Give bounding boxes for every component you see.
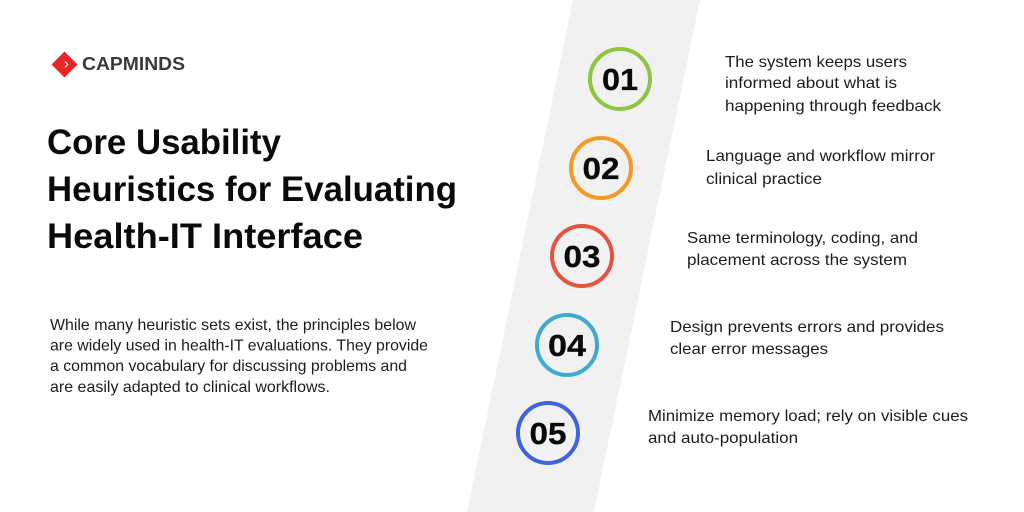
diagonal grey band: [467, 0, 700, 512]
title: Health-IT Interface: [47, 217, 363, 256]
item 01: [590, 49, 942, 115]
text 01: The system keeps users: [725, 54, 907, 71]
badge 02: [571, 138, 631, 198]
intro paragraph: [50, 317, 428, 396]
intro paragraph: While many heuristic sets exist, the principles below: [50, 317, 416, 334]
badge 01: 01: [602, 62, 638, 97]
title: Core Usability: [47, 123, 282, 162]
badge 02: 02: [582, 151, 620, 186]
intro paragraph: are widely used in health-IT evaluations. They provide: [50, 338, 428, 354]
badge 04: [537, 315, 597, 375]
badge 04: 04: [548, 328, 587, 363]
badge 01: [590, 49, 650, 109]
title: Heuristics for Evaluating: [47, 170, 457, 209]
text 05: and auto-population: [648, 430, 798, 447]
logo: Capminds: [52, 52, 185, 78]
logo: Capminds: CAPMINDS: [82, 54, 185, 74]
text 03: placement across the system: [687, 252, 907, 269]
text 04: Design prevents errors and provides: [670, 319, 944, 336]
intro paragraph: a common vocabulary for discussing problems and: [50, 358, 407, 375]
badge 05: [518, 403, 578, 463]
badge 03: [552, 226, 612, 286]
item 02: [571, 138, 936, 198]
intro paragraph: are easily adapted to clinical workflows.: [50, 379, 330, 396]
badge 05: 05: [530, 416, 566, 451]
item 03: [552, 226, 918, 286]
text 02: Language and workflow mirror: [706, 148, 936, 165]
badge 03: 03: [564, 239, 600, 274]
item 05: [518, 403, 968, 463]
text 01: informed about what is: [725, 75, 897, 92]
item 04: [537, 315, 944, 375]
text 02: clinical practice: [706, 171, 822, 188]
text 05: [648, 408, 968, 447]
text 03: [687, 230, 918, 269]
text 04: clear error messages: [670, 341, 828, 358]
text 01: happening through feedback: [725, 98, 942, 115]
text 01: [725, 54, 942, 115]
text 02: [706, 148, 936, 188]
text 05: Minimize memory load; rely on visible cues: [648, 408, 968, 425]
text 03: Same terminology, coding, and: [687, 230, 918, 247]
text 04: [670, 319, 944, 358]
title: [47, 123, 457, 256]
